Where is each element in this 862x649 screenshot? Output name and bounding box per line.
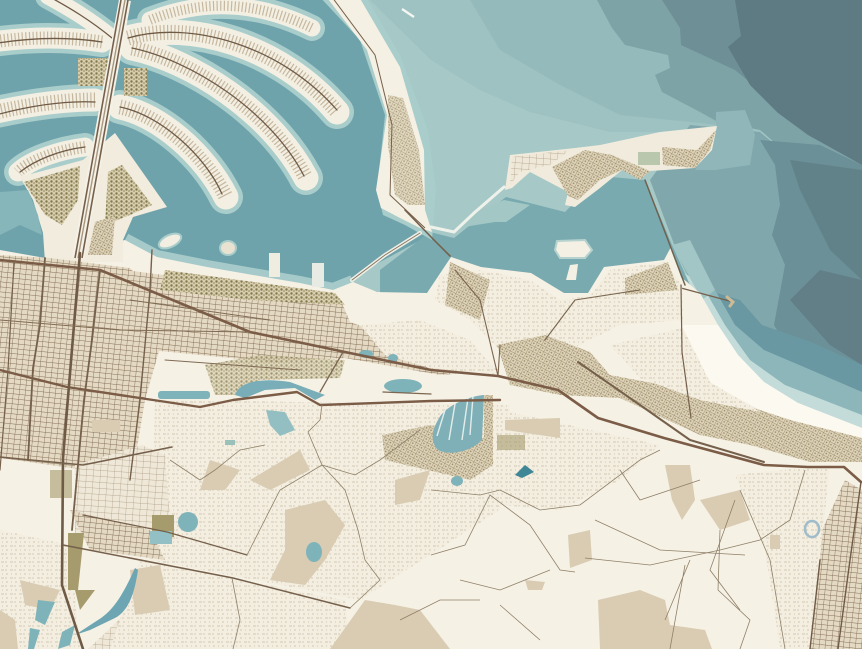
shoreline water bands [672,240,862,440]
plot 1 [152,515,174,537]
islet west 2 [220,241,236,255]
patch wadi [250,450,310,490]
boat [402,9,414,17]
palm frond villas [0,6,337,197]
plot 5 [75,590,95,610]
north-south road 4 [130,250,152,480]
second highway east [578,362,764,462]
sea depth band 1 [470,0,862,130]
eastern lagoon water [380,176,690,320]
right grid road [810,482,861,649]
lake pair 2 [150,531,172,544]
urban fabric [0,255,862,649]
patch tan north [505,418,560,438]
lake south [451,476,463,486]
small lagoon islets [157,9,592,287]
patch west lot [92,420,120,432]
plot 3 [50,470,72,498]
patch mid [395,470,430,505]
patch small [568,530,592,568]
palm base low villas [88,216,115,255]
crescent halo [318,0,436,240]
palm trunk road [75,0,128,258]
lake central with salt streaks [433,395,484,453]
west city south grid [75,445,170,550]
lake small north [388,354,398,362]
creekside vegetation [205,355,345,395]
peninsula dense patch west [445,262,490,320]
southwest grid [70,510,165,560]
lake creek [235,380,325,400]
patch central desert [270,500,345,585]
east light fabric [735,465,830,649]
palm villa block east [124,68,147,96]
nearshore band: peninsula shallows [672,240,715,300]
creek bottom [75,568,138,635]
lower sea band: deep patch [790,160,862,280]
lower sea band: mid dark [760,140,862,410]
west water inlets [0,190,42,300]
palm frond halos [0,0,337,197]
patch east small [700,490,750,530]
lake small north 2 [359,350,373,358]
crescent road [332,0,425,228]
central creek neighbourhood [360,320,500,375]
nearshore band: deep teal [690,285,862,440]
north peninsula [435,262,683,350]
lake pair 1 [178,512,198,532]
island park [638,152,660,165]
plot 4 [497,435,525,450]
sea depth band 2 [597,0,862,175]
pier 1 [269,253,280,277]
cross road 1 [0,447,172,465]
offshore island [505,126,717,207]
coastal vegetated strip [160,270,345,305]
southwest desert speckle [0,530,80,649]
land base: cream desert [0,240,862,649]
west city dense grid [0,255,165,470]
creek highway [320,352,431,394]
patch east lot [770,535,780,549]
ring pond [805,521,819,537]
palm lagoon water [0,0,430,305]
island built area east [662,130,716,168]
creek lower [58,625,75,649]
tan desert patches [0,418,780,649]
islet west 1 [157,230,183,252]
lower sea band: deep east [790,270,862,365]
west-east southern highway [0,370,500,407]
inlet 2 [0,262,12,295]
salt streaks on central lake [437,396,473,440]
lower middle light fabric [110,560,350,649]
patch dune [200,460,240,490]
cross road 3 [83,515,247,555]
sea depth band 0 [370,0,862,132]
lake east strip [484,395,493,465]
connector north [455,270,640,376]
connector east [681,285,691,418]
palm frond roads [0,0,337,194]
lower sea band: mid light [650,125,862,340]
palm villa block west [78,58,108,86]
bridges [352,180,733,306]
patch east [665,465,695,520]
lake east [515,465,534,478]
patch bottom [330,600,450,649]
crescent land [325,0,432,232]
lake creek west [158,391,210,399]
creek far southwest [28,628,40,649]
old town cluster [497,335,862,462]
island built area far west [510,150,570,185]
nearshore band: mid teal [690,285,862,440]
bottom left neighbourhood [88,600,155,649]
palm base land [20,133,167,262]
palm island [0,0,337,197]
patch lower [130,565,170,615]
palm base vegetation west [24,166,80,225]
southeast grid far right [810,480,862,649]
coast shallows halo [125,240,353,290]
islet south [566,264,578,280]
nearshore band: pale [680,270,862,440]
patch bottom centre [598,590,712,649]
peninsula dense patch [625,262,678,295]
pale shoal off island [695,110,755,170]
islet north [555,240,592,258]
sea depth band 4: deepest [728,0,862,165]
north-south road 5 [0,262,14,470]
lake creek east [384,379,422,393]
island sand base [505,126,717,207]
olive plots [50,435,525,610]
inlet 3 [16,262,30,300]
patch south [525,580,545,590]
lake neighbourhood [382,425,493,480]
island built area west [552,150,650,200]
patch lower east [20,580,60,610]
coastal city strip [125,270,500,375]
crescent built strip [388,95,425,205]
central desert speckle [150,400,510,600]
desert tracks [170,405,805,649]
pier 2 [312,263,324,287]
ponds [225,440,235,445]
north-south road 2 [28,258,45,460]
white beach highlight [681,325,862,440]
inlet 1 [0,190,42,235]
highways [0,250,861,649]
east upper grid [610,328,760,412]
north-south road 3 [72,270,100,530]
palm base vegetation east [105,165,152,225]
palm frond land [0,0,337,197]
southeast desert speckle [500,410,660,510]
plot 2 [68,533,84,590]
cross road 2 [63,545,350,608]
lagoon shallows [454,200,530,232]
inland lakes [28,350,819,649]
creek southwest [35,600,55,625]
north-south road west [62,253,83,649]
patch far [0,610,18,649]
sea depth band 3 [662,0,862,160]
lake hatched [266,410,295,436]
main coastal highway [0,260,861,482]
lake central desert [306,542,322,562]
cross road 4 [0,300,300,370]
